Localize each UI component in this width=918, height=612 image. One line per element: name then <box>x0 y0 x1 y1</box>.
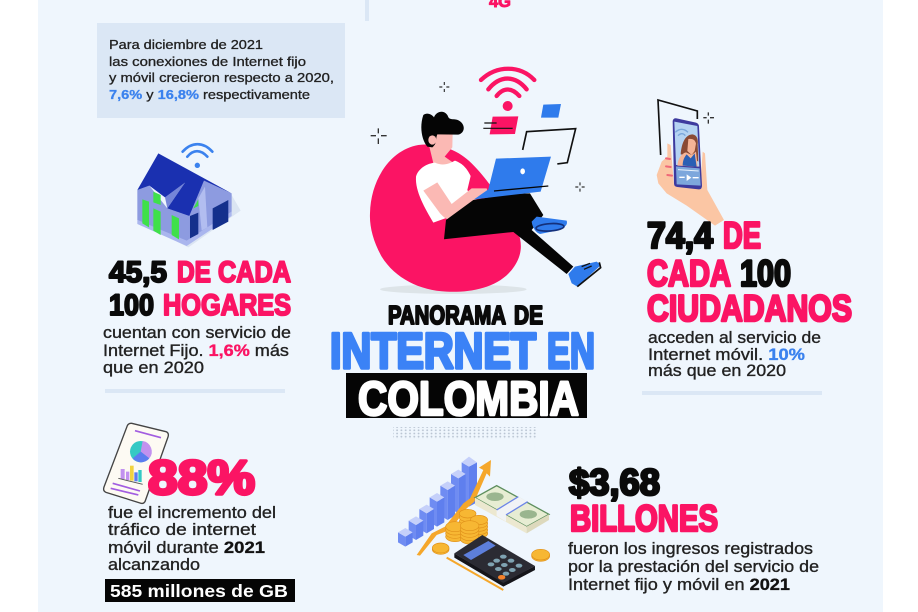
stat: 45,5 de cada 100 hogares: Internet Fijo. 1,6% más <box>103 342 289 360</box>
stat: 45,5 de cada 100 hogares: HOGARES <box>163 289 291 322</box>
stat: 74,4 de cada 100 ciudadanos: 74,4 <box>647 215 713 256</box>
dotted decoration <box>393 427 536 439</box>
stat: 45,5 de cada 100 hogares: CADA <box>218 256 291 289</box>
stat: 74,4 de cada 100 ciudadanos: más que en 2020 <box>648 362 786 380</box>
title: Panorama de Internet en Colombia: PANORAMA <box>388 300 506 330</box>
stat: 88%: 585 millones de GB <box>110 581 288 601</box>
title: Panorama de Internet en Colombia: EN <box>547 323 595 379</box>
stat: 88%: fue el incremento del <box>108 504 276 522</box>
divider right <box>642 391 822 395</box>
title: Panorama de Internet en Colombia: INTERNET <box>330 323 536 379</box>
stat: $3,68 billones: Internet fijo y móvil en 2021 <box>568 576 790 594</box>
stat: 74,4 de cada 100 ciudadanos: CADA <box>647 253 731 294</box>
stat: 88%: tráfico de internet <box>108 521 256 539</box>
top divider stub <box>365 0 369 21</box>
stat: 74,4 de cada 100 ciudadanos: acceden al servicio de <box>648 329 821 347</box>
divider left <box>105 389 285 393</box>
callout: connections growth: Para diciembre de 2021 <box>109 37 263 52</box>
title: Panorama de Internet en Colombia: COLOMBIA <box>358 373 579 426</box>
stat: 45,5 de cada 100 hogares: cuentan con servicio de <box>103 324 291 342</box>
stat: 88% <box>105 452 295 602</box>
stat: $3,68 billones <box>568 462 819 594</box>
stat: $3,68 billones: BILLONES <box>570 498 718 539</box>
stat: 74,4 de cada 100 ciudadanos: Internet móvil. 10% <box>648 346 805 364</box>
stat: $3,68 billones: fueron los ingresos registrados <box>568 540 813 558</box>
title: Panorama de Internet en Colombia: DE <box>514 300 543 330</box>
stat: 45,5 de cada 100 hogares: DE <box>177 256 211 289</box>
icon: tablet with charts <box>104 423 168 503</box>
stat: 74,4 de cada 100 ciudadanos: 100 <box>740 253 791 294</box>
callout: connections growth: las conexiones de Internet fijo <box>109 54 306 69</box>
stat: 88%: móvil durante 2021 <box>108 539 265 557</box>
stat: $3,68 billones: $3,68 <box>569 462 660 503</box>
stat: 45,5 de cada 100 hogares: que en 2020 <box>103 359 204 377</box>
callout: connections growth: 7,6% y 16,8% respectivamente <box>109 87 310 102</box>
illustration: person with laptop on beanbag <box>370 69 601 294</box>
callout: connections growth: y móvil crecieron respecto a 2020, <box>109 70 334 85</box>
stat: 88%: 88% <box>148 452 255 505</box>
stat: 45,5 de cada 100 hogares <box>103 256 291 377</box>
stat: 74,4 de cada 100 ciudadanos <box>647 215 852 380</box>
stat: $3,68 billones: por la prestación del servicio de <box>568 558 819 576</box>
stat: 88%: alcanzando <box>108 556 200 574</box>
icon: growth bars, coins, money, calculator <box>398 457 550 590</box>
icon: house with wifi <box>137 144 241 247</box>
stat: 45,5 de cada 100 hogares: 45,5 <box>109 256 167 289</box>
callout: connections growth <box>97 23 345 118</box>
stat: 45,5 de cada 100 hogares: 100 <box>109 289 154 322</box>
icon: hand holding phone <box>657 100 724 226</box>
stat: 74,4 de cada 100 ciudadanos: CIUDADANOS <box>647 288 852 329</box>
title: Panorama de Internet en Colombia <box>330 300 595 426</box>
stat: 74,4 de cada 100 ciudadanos: DE <box>723 215 761 256</box>
